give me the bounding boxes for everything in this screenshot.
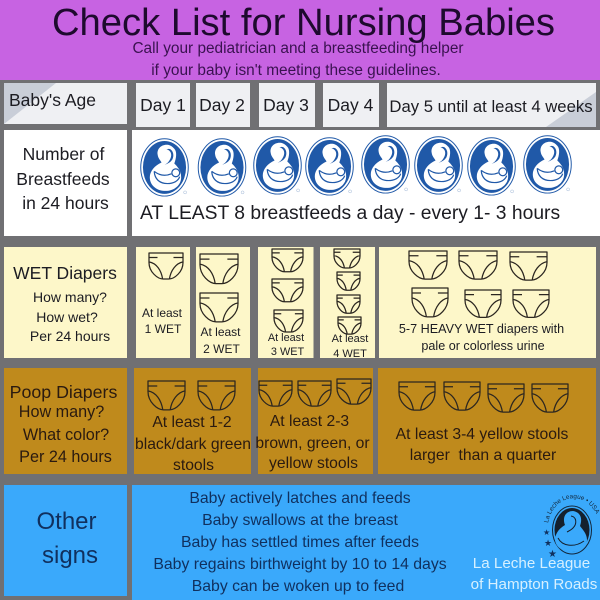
poop diapers row label [4,368,127,474]
logos [141,136,571,196]
poop day 3-4: brown, green, or [255,435,370,452]
wet diapers day 3 [258,247,314,358]
wet diapers day 1: 1 WET [145,322,182,336]
signs list: Baby has settled times after feeds [181,534,419,551]
wet diapers day 2: At least [200,325,241,339]
poop day 5: larger than a quarter [410,447,556,464]
wet diapers row label: How many? [33,289,107,305]
league name [471,555,598,593]
wet diapers day 4: 4 WET [333,348,367,360]
age header row: Day 5 until at least 4 weeks [389,97,593,116]
poop diapers row label: Poop Diapers [10,382,117,402]
signs list: Baby actively latches and feeds [189,490,411,507]
wet diapers day 2 [196,247,250,358]
poop day 1-2: black/dark green [135,436,251,453]
subtitle: Call your pediatrician and a breastfeeding helper [132,40,464,57]
league logo: ★ [543,528,550,537]
age header row: Day 1 [140,95,186,115]
wet diapers row label [4,247,127,358]
breastfeeds row content: AT LEAST 8 breastfeeds a day - every 1- 3 hours [140,203,560,224]
wet diapers day 3: At least [268,332,304,344]
breastfeeds row label: Breastfeeds [16,169,110,189]
breastfeeds row content [132,130,600,236]
wet diapers day 3: 3 WET [271,346,304,358]
title: Check List for Nursing Babies [52,1,555,44]
other signs panel [132,485,600,600]
league logo: ★ [544,538,552,548]
wet diapers day 5: 5-7 HEAVY WET diapers with [399,322,564,336]
other signs label: signs [42,542,98,569]
header banner [0,0,600,80]
subtitle: if your baby isn't meeting these guidelines. [151,62,441,79]
age header row: Day 4 [328,95,374,115]
wet diapers row label: WET Diapers [13,263,117,283]
wet diapers day 1 [136,247,190,358]
breastfeeds row label [4,130,127,236]
wet diapers day 1: At least [142,306,183,320]
poop day 3-4: yellow stools [269,455,358,472]
poop diapers row label: Per 24 hours [19,448,112,466]
league name: of Hampton Roads [471,576,598,593]
signs list: Baby regains birthweight by 10 to 14 days [153,556,447,573]
poop day 5: At least 3-4 yellow stools [396,426,568,443]
breastfeeds row label: Number of [23,144,104,164]
poop diapers row label: What color? [23,426,109,444]
poop day 5 [378,368,596,474]
wet diapers day 5 [379,247,596,358]
breastfeeds row label: in 24 hours [22,193,109,213]
wet diapers day 4 [320,247,375,360]
poop day 3-4: At least 2-3 [270,413,349,430]
other signs label [4,485,127,596]
age header row: Day 2 [199,95,245,115]
league logo: La Leche League • USA [544,494,600,522]
wet diapers day 4: At least [332,333,368,345]
age header row [4,83,596,127]
poop diapers row label: How many? [19,403,104,421]
wet diapers day 2: 2 WET [203,342,241,356]
poop day 1-2: stools [173,457,214,474]
wet diapers day 5: pale or colorless urine [421,339,545,353]
league name: La Leche League [473,555,590,572]
poop day 3-4 [255,368,373,474]
age header row: Day 3 [263,95,309,115]
wet diapers row label: How wet? [36,309,98,325]
poop day 1-2: At least 1-2 [152,414,232,431]
signs list: Baby can be woken up to feed [192,578,404,595]
signs list: Baby swallows at the breast [202,512,399,529]
subtitle [132,40,464,79]
age header row: Baby's Age [9,90,96,110]
wet diapers row label: Per 24 hours [30,328,110,344]
poop day 1-2 [134,368,251,474]
signs list [153,490,447,595]
league logo [543,494,600,560]
league logo: ★ [548,549,557,560]
other signs label: Other [36,508,97,535]
